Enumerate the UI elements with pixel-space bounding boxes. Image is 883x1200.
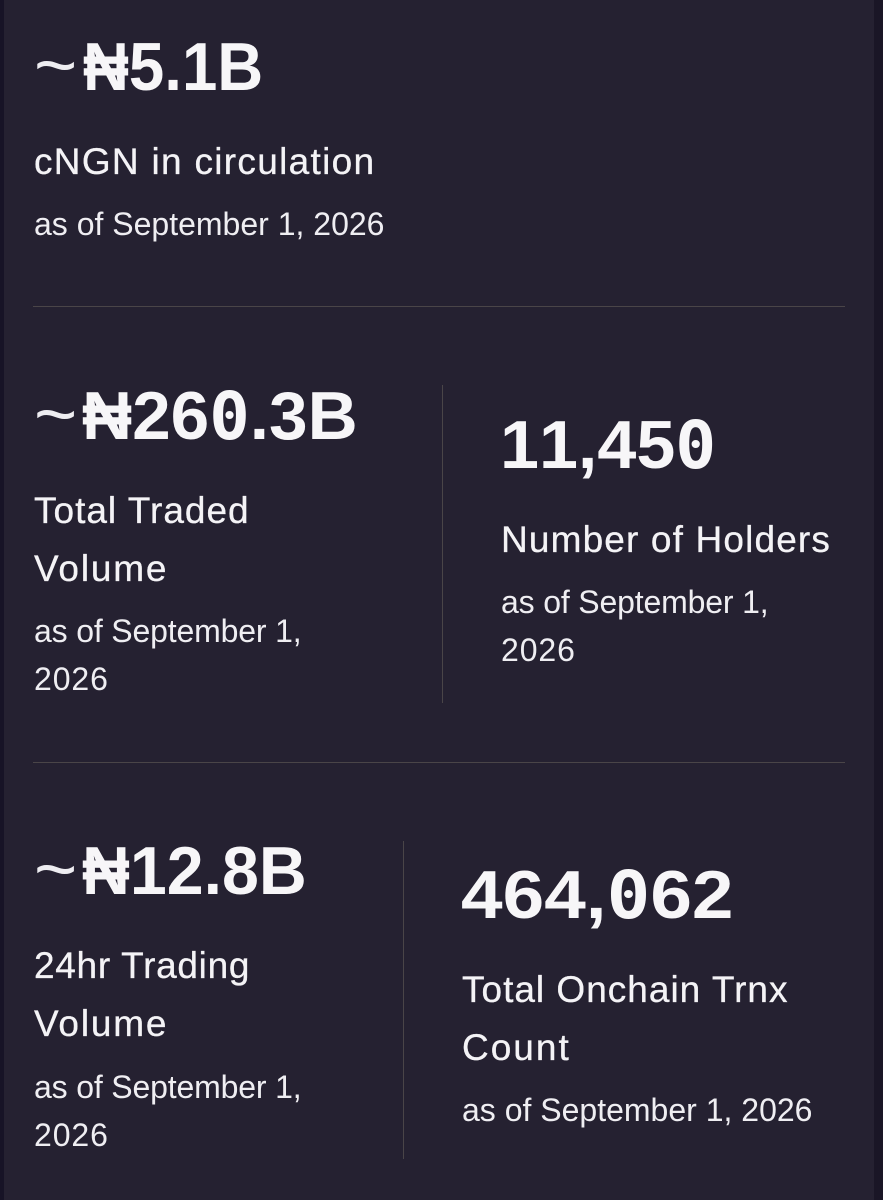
date: 2026: [34, 1117, 109, 1153]
label: Count: [462, 1027, 571, 1068]
date: as of September 1,: [34, 613, 302, 649]
stat: total traded volume: [34, 372, 358, 697]
label: Total Onchain Trnx: [462, 969, 788, 1010]
stat: cNGN in circulation: [34, 23, 384, 242]
value: 11,450: [500, 407, 716, 484]
label: [34, 490, 250, 589]
label: cNGN in circulation: [34, 141, 375, 182]
date: as of September 1,: [501, 584, 768, 620]
date: 2026: [501, 632, 576, 668]
date: as of September 1, 2026: [34, 206, 384, 242]
date: as of September 1, 2026: [462, 1092, 812, 1128]
stat: 24hr trading volume: [34, 827, 307, 1153]
value: ~: [34, 23, 77, 106]
stat: total onchain transaction count: [461, 857, 812, 1128]
value: ₦260.3B: [82, 378, 358, 455]
label: Total Traded: [34, 490, 250, 531]
value: ₦5.1B: [83, 29, 263, 105]
date: 2026: [34, 661, 109, 697]
label: [34, 945, 250, 1044]
date: [34, 1069, 302, 1153]
value: ~: [34, 827, 77, 910]
value: 464,062: [461, 857, 734, 934]
label: 24hr Trading: [34, 945, 250, 986]
label: Volume: [34, 548, 168, 589]
date: [501, 584, 768, 668]
label: Volume: [34, 1003, 168, 1044]
label: Number of Holders: [501, 519, 831, 560]
value: ₦12.8B: [82, 833, 307, 909]
stat: number of holders: [500, 407, 831, 668]
label: [462, 969, 788, 1068]
value: ~: [34, 372, 77, 455]
date: as of September 1,: [34, 1069, 302, 1105]
date: [34, 613, 302, 697]
